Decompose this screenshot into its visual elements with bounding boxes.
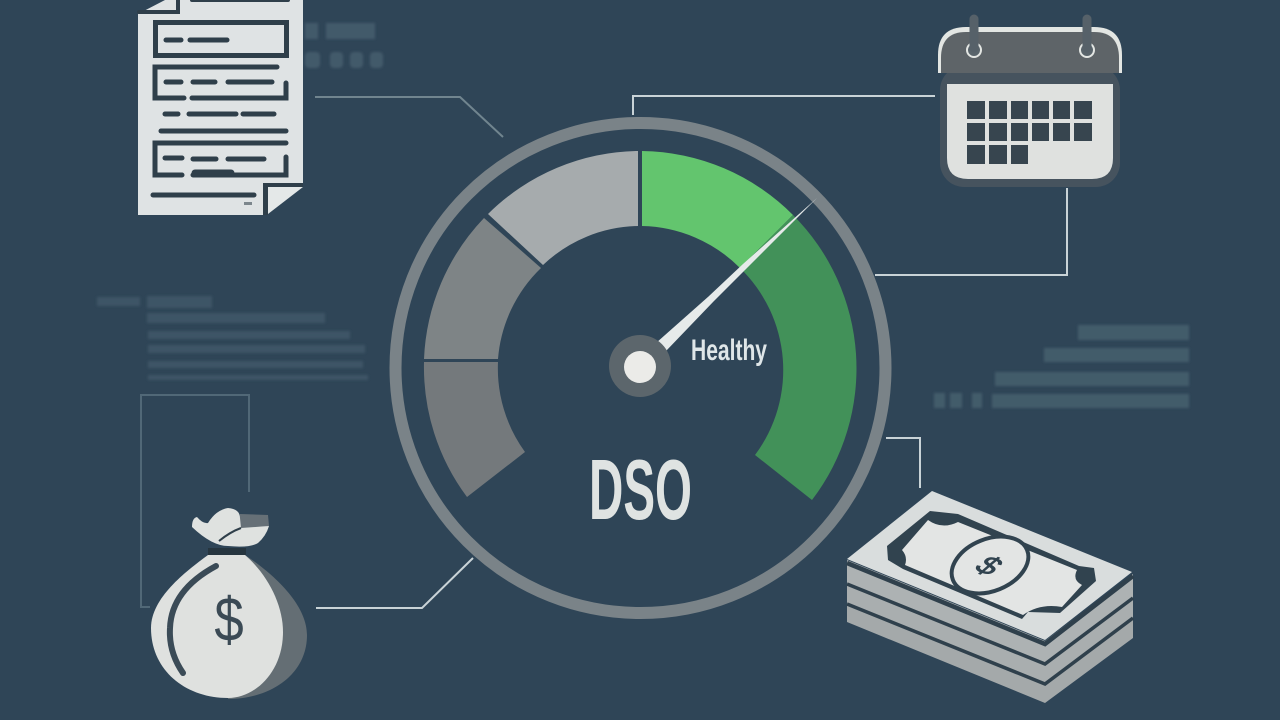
faint text block: middle left [97, 296, 368, 380]
gauge segment: top light grey [488, 151, 638, 265]
gauge [396, 123, 886, 613]
money bag dollar sign: $ [214, 586, 244, 655]
connector: gauge to banknotes [886, 438, 920, 488]
gauge hub [609, 335, 671, 397]
label: DSO: DSO [589, 443, 692, 538]
label: Healthy: Healthy [691, 334, 767, 367]
connector: money bag to gauge [316, 558, 473, 608]
icon: calendar [938, 19, 1122, 187]
faint text block: top left [305, 23, 383, 68]
gauge outer ring [396, 123, 886, 613]
banknote stack sides [847, 560, 1133, 703]
gauge segment: upper left grey [424, 218, 541, 359]
icon: banknote stack [847, 491, 1133, 703]
gauge segment: bright green [642, 151, 793, 268]
faint text block: middle right [934, 325, 1189, 408]
banknote top face [847, 491, 1132, 640]
connector: calendar to gauge right [875, 188, 1067, 275]
banknote dollar sign: $ [967, 551, 1011, 580]
banknote medallion [943, 526, 1037, 604]
connector: calendar to gauge top [633, 96, 935, 115]
icon: document [138, 0, 303, 215]
gauge segment: dark green [740, 215, 856, 500]
connector: faint outline above money bag [141, 395, 249, 607]
banknote inner panel [902, 520, 1082, 615]
icon: money bag [151, 508, 307, 699]
gauge segment: lower left grey [424, 362, 525, 497]
banknote inner border [887, 511, 1096, 619]
gauge needle [656, 198, 817, 351]
connector: document to gauge [315, 97, 503, 137]
